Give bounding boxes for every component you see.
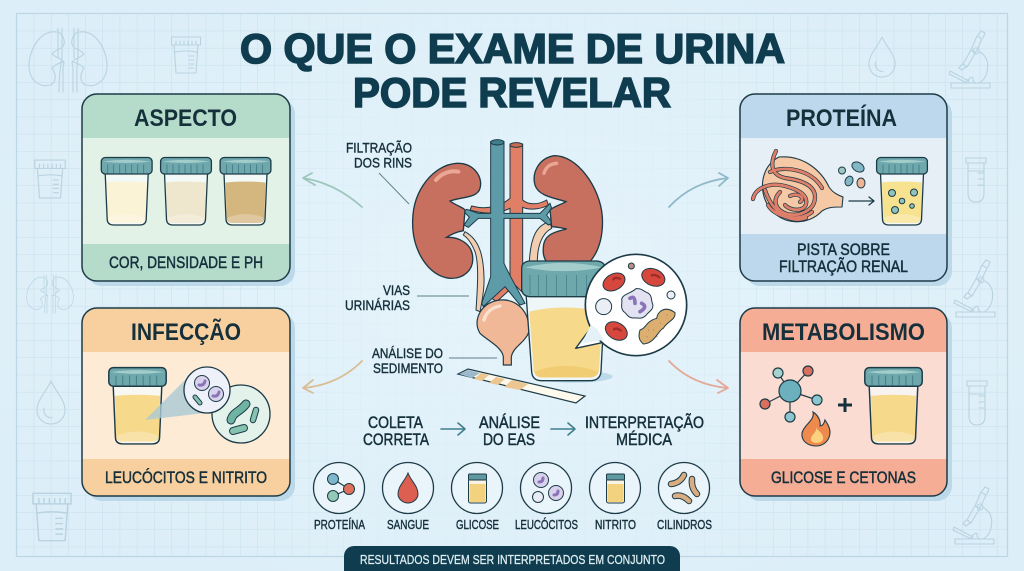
icon: bacteria circle xyxy=(212,385,270,443)
process flow xyxy=(363,413,704,449)
icon: sangue xyxy=(382,462,434,532)
callout: vias urinarias: VIAS xyxy=(383,282,410,298)
vessel openings xyxy=(491,140,523,147)
arrow: step one to two xyxy=(441,423,465,435)
panel: infeccao xyxy=(82,308,295,501)
callout: analise do sedimento: ANÁLISE DO xyxy=(372,345,443,361)
heading: metabolismo: METABOLISMO xyxy=(762,319,925,346)
step: interpretacao medica xyxy=(585,413,704,449)
arrow: to proteina xyxy=(669,173,728,207)
step: interpretacao medica: MÉDICA xyxy=(616,430,673,449)
heading: infeccao: INFECÇÃO xyxy=(131,318,241,346)
arrow: to infeccao xyxy=(303,361,362,393)
icon: leucocitos: LEUCÓCITOS xyxy=(515,517,578,532)
step: coleta correta: CORRETA xyxy=(363,430,430,449)
central cup xyxy=(522,261,613,383)
icon: proteina: PROTEÍNA xyxy=(314,517,365,532)
heading: proteina: PROTEÍNA xyxy=(786,104,897,132)
icon: cup xyxy=(865,368,922,444)
caption: proteina: PISTA SOBRE xyxy=(797,240,890,259)
caption: infeccao: LEUCÓCITOS E NITRITO xyxy=(105,468,267,487)
callout: vias urinarias xyxy=(345,282,469,313)
title xyxy=(240,25,785,116)
icon: magnifier beam xyxy=(145,378,213,420)
icon: cilindros: CILINDROS xyxy=(657,517,712,532)
icon: leukocyte circle xyxy=(184,367,230,413)
title: PODE REVELAR xyxy=(353,69,671,116)
title: O QUE O EXAME DE URINA xyxy=(240,25,785,72)
heading: aspecto: ASPECTO xyxy=(134,105,237,132)
arrow: step two to three xyxy=(551,423,575,435)
arrow: to aspecto xyxy=(303,173,362,207)
left kidney xyxy=(413,163,481,278)
caption: proteina: FILTRAÇÃO RENAL xyxy=(779,257,908,276)
step: analise do eas: ANÁLISE xyxy=(479,413,540,432)
icon: cilindros xyxy=(657,462,712,532)
icon row xyxy=(314,462,712,532)
callout: analise do sedimento: SEDIMENTO xyxy=(373,360,443,376)
arrow: into cup xyxy=(849,197,874,205)
icon: cup with protein xyxy=(877,158,927,225)
magnifier bubble xyxy=(576,254,687,356)
callout: filtracao dos rins: FILTRAÇÃO xyxy=(346,140,412,156)
footer banner xyxy=(344,546,680,571)
icon: glicose xyxy=(452,462,502,532)
icon: glicose: GLICOSE xyxy=(456,517,499,532)
step: coleta correta xyxy=(363,413,430,449)
icon: three sample cups xyxy=(101,158,271,225)
icon: sangue: SANGUE xyxy=(387,517,429,532)
callout: analise do sedimento xyxy=(372,345,497,376)
step: interpretacao medica: INTERPRETAÇÃO xyxy=(585,413,704,432)
callout: vias urinarias: URINÁRIAS xyxy=(345,297,410,313)
icon: nitrito xyxy=(590,462,640,532)
caption: metabolismo: GLICOSE E CETONAS xyxy=(771,468,916,487)
reagent strip xyxy=(458,369,585,403)
caption: proteina xyxy=(779,240,908,276)
footer banner: RESULTADOS DEVEM SER INTERPRETADOS EM CONJUNTO xyxy=(360,553,665,567)
icon: flame xyxy=(802,412,830,446)
icon: molecule xyxy=(760,366,822,422)
ureters xyxy=(463,222,552,312)
bladder xyxy=(477,300,529,365)
callout: filtracao dos rins: DOS RINS xyxy=(354,154,412,170)
step: analise do eas: DO EAS xyxy=(483,430,535,449)
step: analise do eas xyxy=(479,413,540,449)
panel: metabolismo xyxy=(740,308,952,501)
arrow: to metabolismo xyxy=(669,361,728,393)
icon: plus xyxy=(838,398,852,412)
right kidney xyxy=(534,156,603,262)
caption: aspecto: COR, DENSIDADE E PH xyxy=(109,253,263,272)
icon: nitrito: NITRITO xyxy=(595,517,636,532)
icon: leucocitos xyxy=(515,462,578,532)
icon: glomerulus xyxy=(753,151,843,222)
vein xyxy=(464,142,553,307)
icon: protein particles xyxy=(838,160,866,188)
callout: filtracao dos rins xyxy=(346,140,412,204)
icon: cup xyxy=(109,368,166,444)
panel: aspecto xyxy=(82,94,295,286)
step: coleta correta: COLETA xyxy=(368,413,424,432)
artery xyxy=(470,144,548,302)
icon: proteina xyxy=(314,462,365,532)
illustration: urinary system xyxy=(413,140,687,383)
panel: proteina xyxy=(740,94,952,286)
